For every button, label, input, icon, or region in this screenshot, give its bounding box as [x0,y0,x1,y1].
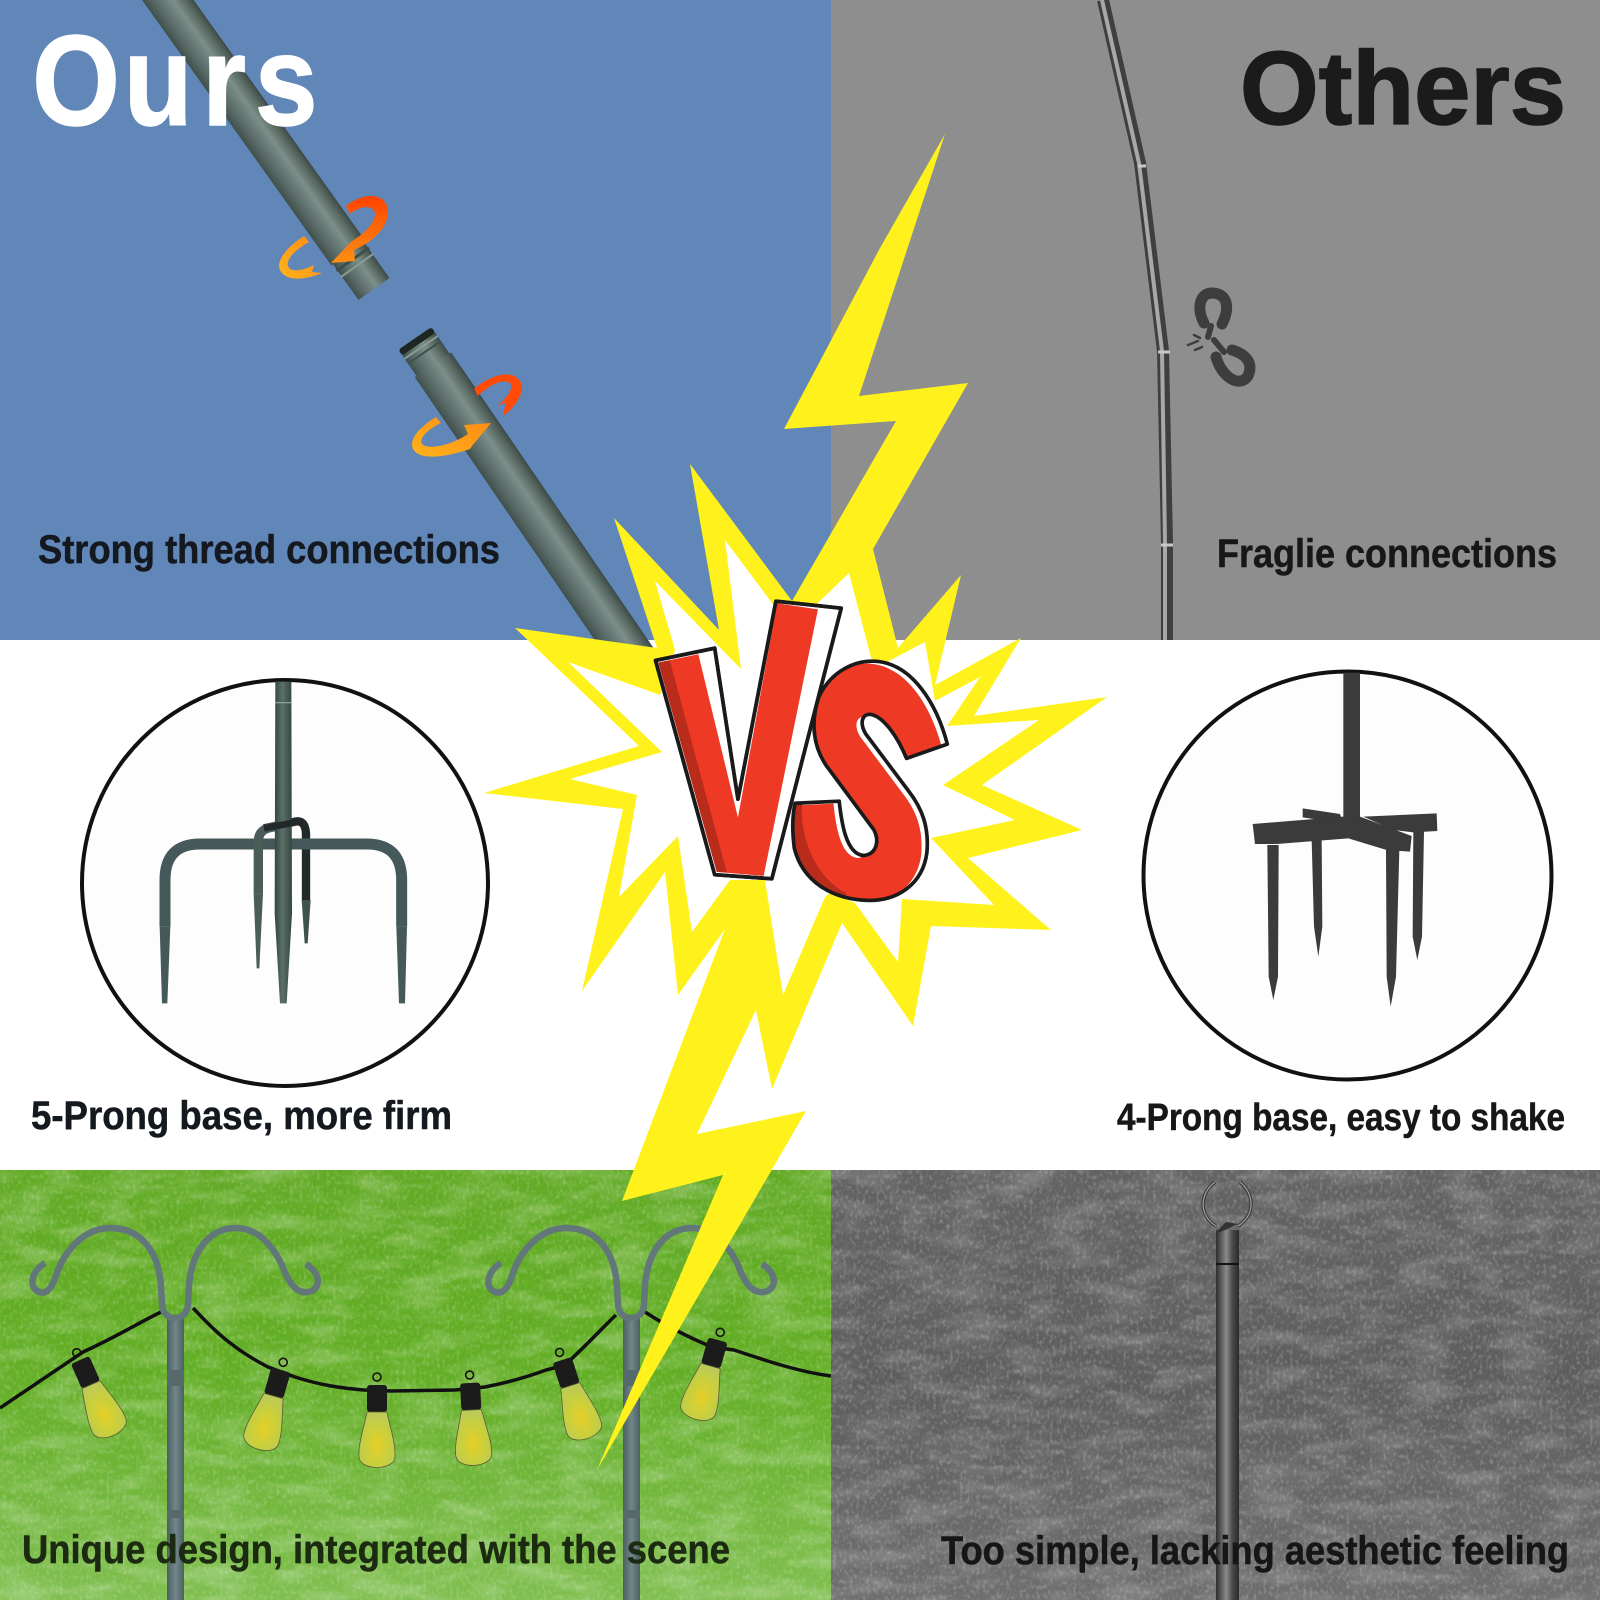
shepherd hook left [32,1228,318,1600]
light bulb 3 [359,1373,395,1468]
light bulb 4 [451,1370,492,1466]
caption: 5-prong base: 5-Prong base, more firm [31,1094,452,1138]
heading: Others: Others [1240,31,1566,147]
caption: unique design: Unique design, integrated with the scene [22,1528,730,1572]
icon: lower rotation arrow [412,374,522,457]
VS lettering [656,601,947,903]
string light cable [0,1308,831,1408]
thin bent pole [1102,0,1173,640]
icon: upper rotation arrow [279,196,388,279]
caption: strong thread connections: Strong thread connections [38,528,500,572]
letter V [656,601,841,879]
icon: broken chain [1188,293,1250,381]
lower threaded tube [400,328,654,648]
panel: others fragile connections [831,0,1600,640]
panel: ours 5-prong base [31,680,488,1138]
caption: fragile connections: Fraglie connections [1217,532,1557,576]
light bulb 6 [680,1328,727,1421]
light bulb 2 [243,1358,290,1451]
heading: Ours: Ours [32,9,318,153]
panel: ours lawn scene [0,1170,831,1600]
simple ring-top pole [1203,1182,1251,1600]
shepherd hook right [488,1228,774,1600]
light bulb 5 [553,1348,602,1440]
lightning bolt and starburst [484,134,1107,1470]
upper threaded tube [142,0,391,301]
panel: others lawn scene [831,1170,1600,1600]
fork illustration [1253,673,1437,1007]
light bulb 1 [72,1348,127,1438]
panel: ours thread connections [0,0,831,682]
panel: others 4-prong base [1117,672,1565,1139]
letter S [787,661,947,903]
fork illustration [160,682,407,1003]
